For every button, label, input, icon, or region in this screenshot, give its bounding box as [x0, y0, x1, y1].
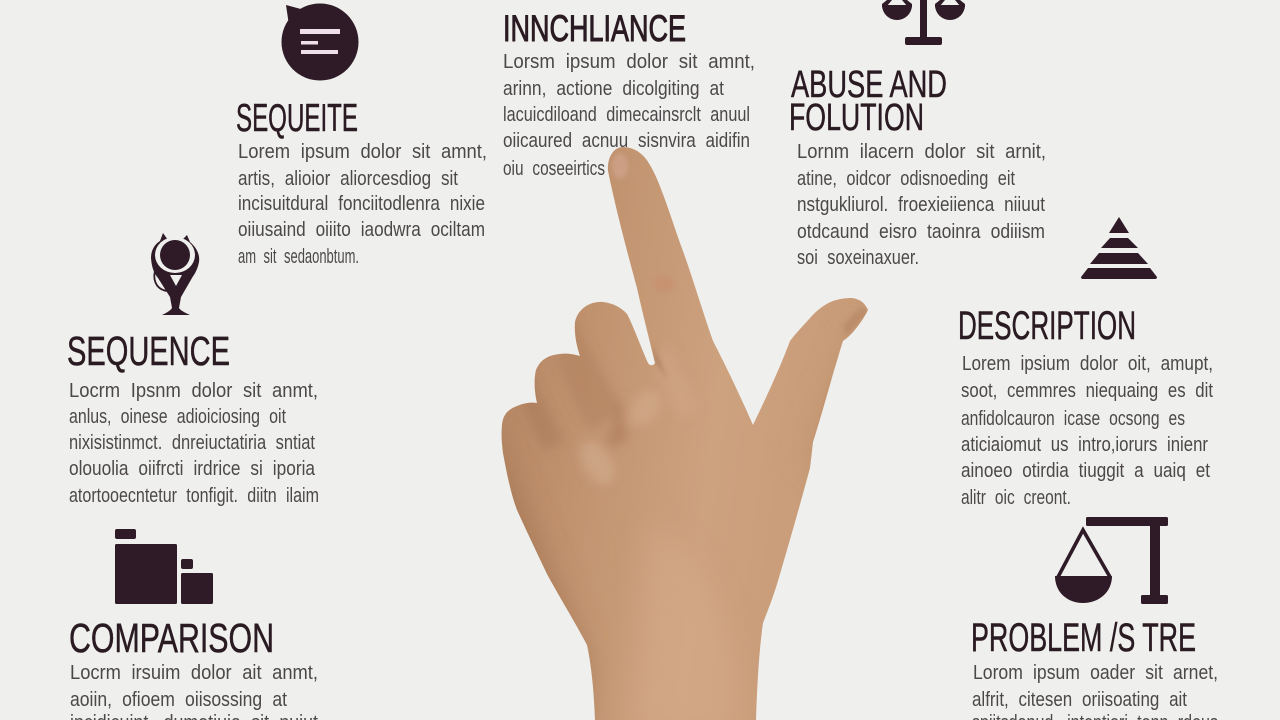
text block: oiicaured acnuu sisnvira aidifin — [503, 130, 750, 152]
text block: incisuitdural fonciitodlenra nixie — [238, 193, 485, 215]
text block: olouolia oiifrcti irdrice si iporia — [69, 458, 316, 480]
icon: pyramid — [1081, 217, 1157, 279]
text block — [503, 51, 755, 180]
panel: description — [958, 217, 1213, 509]
panel: comparison — [69, 529, 318, 720]
text block: ainoeo otirdia tiuggit a uaiq et — [961, 460, 1210, 482]
text block — [238, 141, 487, 268]
panel: cause and solution — [789, 0, 1046, 269]
text block: anlus, oinese adioiciosing oit — [69, 406, 286, 428]
text block: alfrit, citesen oriisoating ait — [972, 689, 1187, 711]
text block: alitr oic creont. — [961, 487, 1071, 509]
text block: oiiusaind oiiito iaodwra ociltam — [238, 219, 485, 241]
text block: oiu coseeirtics — [503, 158, 605, 180]
heading: SEQUENCE — [67, 328, 230, 374]
heading: DESCRIPTION — [958, 304, 1136, 348]
heading: COMPARISON — [69, 615, 274, 661]
text block: Lorem ipsium dolor oit, amupt, — [962, 353, 1213, 375]
text block — [70, 662, 318, 720]
heading — [789, 64, 947, 139]
text block: soot, cemmres niequaing es dit — [961, 380, 1213, 402]
heading: FOLUTION — [789, 97, 924, 139]
hand pointing up — [480, 140, 880, 720]
icon: speech bubble — [282, 4, 358, 80]
text block: atine, oidcor odisnoeding eit — [797, 168, 1015, 190]
text block: otdcaund eisro taoinra odiiism — [797, 221, 1045, 243]
text block — [961, 353, 1213, 509]
text block: arinn, actione dicolgiting at — [503, 78, 724, 100]
text block: Lorem ipsum dolor sit amnt, — [238, 141, 487, 163]
text block: Lorsm ipsum dolor sit amnt, — [503, 51, 755, 73]
text block: Lornm ilacern dolor sit arnit, — [797, 141, 1046, 163]
text block: nstgukliurol. froexieiienca niiuut — [797, 194, 1045, 216]
heading: SEQUEITE — [236, 97, 358, 140]
panel: problem — [971, 517, 1218, 720]
text block — [69, 380, 319, 507]
text block: am sit sedaonbtum. — [238, 246, 359, 268]
text block: soi soxeinaxuer. — [797, 247, 919, 269]
heading: ABUSE AND — [791, 64, 947, 106]
text block: Lorom ipsum oader sit arnet, — [973, 662, 1218, 684]
text block: artis, alioior aliorcesdiog sit — [238, 168, 458, 190]
text block: aoiin, ofioem oiisossing at — [70, 689, 287, 711]
text block: atortooecntetur tonfigit. diitn ilaim — [69, 485, 319, 507]
icon: one-sided scale — [1055, 517, 1168, 604]
icon: goblet with ring — [151, 233, 199, 315]
icon: folders — [115, 529, 213, 604]
heading: INNCHLIANCE — [503, 8, 686, 49]
text block: nixisistinmct. dnreiuctatiria sntiat — [69, 432, 315, 454]
text block — [972, 662, 1218, 720]
panel: importance — [503, 8, 755, 180]
icon: balance scale — [882, 0, 965, 45]
text block: Locrm Ipsnm dolor sit anmt, — [69, 380, 318, 402]
panel: sequence (left) — [67, 233, 319, 507]
panel: sequence (top) — [236, 4, 487, 268]
text block — [797, 141, 1046, 269]
text block: Locrm irsuim dolor ait anmt, — [70, 662, 318, 684]
text block: lacuicdiloand dimecainsrclt anuul — [503, 104, 750, 126]
text block: aticiaiomut us intro,iorurs inienr — [961, 434, 1208, 456]
text block: anfidolcauron icase ocsong es — [961, 408, 1185, 430]
